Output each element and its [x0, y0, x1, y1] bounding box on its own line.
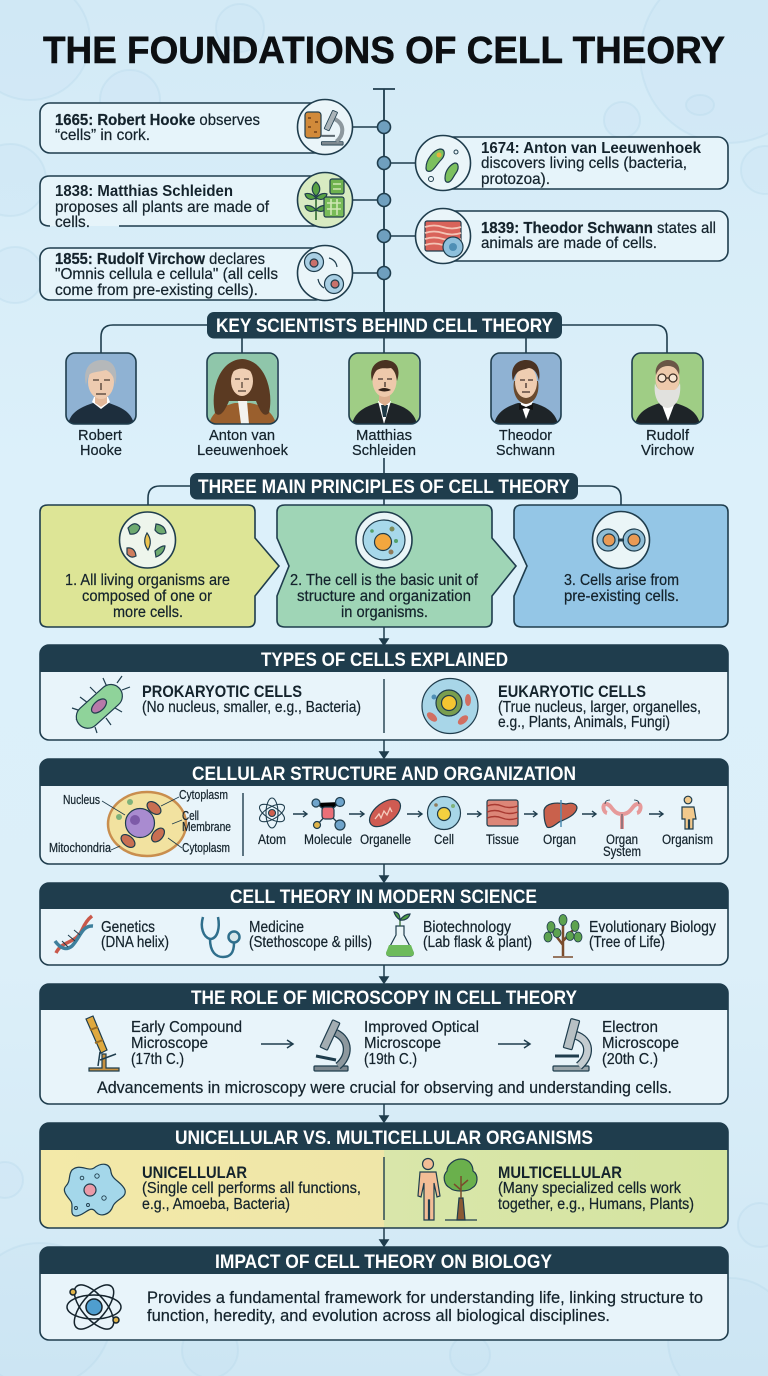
- impact text: Provides a fundamental framework for understanding life, linking structure to: [147, 1288, 703, 1307]
- hierarchy row: atom to organism: [257, 794, 713, 859]
- hierarchy labels: Atom: [258, 832, 286, 847]
- scientist names: Schleiden: [352, 442, 416, 459]
- panel: impact: [40, 1247, 728, 1340]
- eukaryotic text: (True nucleus, larger, organelles,: [498, 699, 701, 716]
- evolutionary biology text: Evolutionary Biology: [589, 919, 716, 936]
- unicellular text: [142, 1164, 361, 1213]
- panel: principle 3: 3. Cells arise from: [564, 572, 679, 589]
- unicellular text: UNICELLULAR: [142, 1164, 247, 1182]
- flow arrows: [293, 811, 663, 817]
- portrait: Robert Hooke: [66, 353, 136, 424]
- panel: principle 1: [40, 505, 279, 627]
- event: 1839 Schwann: [416, 208, 728, 264]
- electron microscope text: (20th C.): [602, 1051, 658, 1068]
- early microscope text: [131, 1019, 242, 1068]
- unicellular text: (Single cell performs all functions,: [142, 1180, 361, 1197]
- panel: principle 1: 1. All living organisms are: [65, 572, 230, 589]
- hierarchy labels: System: [603, 844, 641, 859]
- panel: principle 3: pre-existing cells.: [564, 588, 679, 605]
- panel: modern science: CELL THEORY IN MODERN SCIENCE: [230, 887, 537, 908]
- multicellular text: (Many specialized cells work: [498, 1180, 681, 1197]
- portrait: Matthias Schleiden: [349, 353, 420, 424]
- medicine text: (Stethoscope & pills): [249, 934, 372, 951]
- multicellular text: [498, 1164, 694, 1213]
- medicine text: [249, 919, 372, 951]
- hierarchy labels: [258, 832, 713, 859]
- event: 1665 Hooke: [40, 100, 352, 154]
- impact text: [147, 1288, 703, 1325]
- panel: principle 3: [514, 505, 728, 627]
- hierarchy labels: Organism: [662, 832, 713, 847]
- prokaryotic text: [142, 683, 361, 716]
- icon: electron microscope: [553, 1018, 589, 1071]
- scientist names: Schwann: [496, 442, 555, 459]
- panel: types of cells: [40, 645, 728, 740]
- panel: principle 1: composed of one or: [82, 588, 212, 605]
- scientist names: Leeuwenhoek: [197, 442, 288, 459]
- event: 1674 Leeuwenhoek: discovers living cells (bacteria,: [481, 155, 687, 172]
- eukaryotic text: e.g., Plants, Animals, Fungi): [498, 714, 670, 731]
- hierarchy labels: Organ: [543, 832, 576, 847]
- portrait: Anton van Leeuwenhoek: [207, 353, 278, 424]
- panel: principle 1: more cells.: [113, 604, 183, 621]
- impact text: function, heredity, and evolution across all biological disciplines.: [147, 1306, 610, 1325]
- scientist names: Robert: [78, 427, 123, 444]
- panel: impact: IMPACT OF CELL THEORY ON BIOLOGY: [215, 1252, 552, 1273]
- optical microscope text: [364, 1019, 479, 1068]
- panel: microscopy: THE ROLE OF MICROSCOPY IN CELL THEORY: [191, 988, 577, 1009]
- electron microscope text: Electron: [602, 1019, 658, 1036]
- timeline axis: [373, 89, 395, 312]
- multicellular text: together, e.g., Humans, Plants): [498, 1196, 694, 1213]
- icon: organism: [682, 796, 696, 829]
- icon: organ: [544, 800, 577, 828]
- event: 1855 Virchow: "Omnis cellula e cellula" (all cells: [55, 266, 278, 283]
- icon: atom: [257, 798, 287, 828]
- icon: bacterium: [72, 676, 130, 733]
- scientist names: Anton van: [209, 427, 275, 444]
- icon: early compound microscope: [86, 1016, 119, 1071]
- biotechnology text: [423, 919, 532, 951]
- microscopy caption: Advancements in microscopy were crucial for observing and understanding cells.: [97, 1079, 672, 1097]
- scientist names: Theodor: [499, 427, 552, 444]
- panel: unicellular vs multicellular: [40, 1123, 728, 1228]
- biotechnology text: Biotechnology: [423, 919, 511, 936]
- panel: modern science: [40, 883, 728, 965]
- arrows between sections: [380, 627, 388, 1246]
- event: 1855 Virchow: come from pre-existing cells).: [55, 282, 258, 299]
- early microscope text: (17th C.): [131, 1051, 184, 1068]
- timeline: [40, 89, 728, 312]
- hierarchy labels: Organ: [606, 832, 638, 847]
- diagram: labelled animal cell: Cytoplasm: [182, 841, 230, 855]
- diagram: labelled animal cell: Membrane: [182, 820, 231, 834]
- genetics text: (DNA helix): [101, 934, 169, 951]
- event: 1838 Schleiden: [40, 172, 352, 231]
- event: 1674 Leeuwenhoek: [416, 136, 728, 190]
- eukaryotic text: [498, 683, 701, 731]
- electron microscope text: [602, 1019, 679, 1068]
- scientist names: Matthias: [356, 427, 412, 444]
- connector to principles: [148, 458, 621, 505]
- optical microscope text: (19th C.): [364, 1051, 417, 1068]
- genetics text: Genetics: [101, 919, 155, 936]
- scientist names: Rudolf: [646, 427, 690, 444]
- title: THE FOUNDATIONS OF CELL THEORY: [43, 30, 725, 72]
- event: 1838 Schleiden: cells.: [55, 214, 90, 231]
- event: 1674 Leeuwenhoek: protozoa).: [481, 171, 550, 188]
- icon: DNA helix: [55, 916, 93, 953]
- event: 1839 Schwann: 1839: Theodor Schwann states all: [481, 220, 716, 237]
- panel: cellular structure: [40, 759, 728, 864]
- portrait: Theodor Schwann: [491, 353, 561, 424]
- icon: tissue: [487, 800, 518, 826]
- icon: lab flask and plant: [386, 912, 414, 956]
- panel: microscopy: [40, 984, 728, 1104]
- diagram: labelled animal cell: [49, 788, 231, 856]
- icon: cell: [428, 796, 460, 830]
- timeline nodes: [378, 120, 390, 280]
- icon: tree of life: [544, 914, 582, 957]
- scientist names: Virchow: [641, 442, 694, 459]
- early microscope text: Microscope: [131, 1035, 208, 1052]
- genetics text: [101, 919, 169, 951]
- biotechnology text: (Lab flask & plant): [423, 934, 532, 951]
- event: 1674 Leeuwenhoek: 1674: Anton van Leeuwenhoek: [481, 140, 701, 157]
- panel: principle 2: structure and organization: [297, 588, 471, 605]
- prokaryotic text: (No nucleus, smaller, e.g., Bacteria): [142, 699, 361, 716]
- icon: atom: [67, 1279, 121, 1335]
- arrow: [261, 1040, 293, 1048]
- event: 1838 Schleiden: 1838: Matthias Schleiden: [55, 183, 233, 200]
- scientist names: Hooke: [80, 442, 122, 459]
- heading: three main principles: THREE MAIN PRINCIPLES OF CELL THEORY: [198, 477, 570, 498]
- medicine text: Medicine: [249, 919, 304, 936]
- hierarchy labels: Tissue: [486, 832, 519, 847]
- eukaryotic text: EUKARYOTIC CELLS: [498, 683, 646, 701]
- panel: unicellular vs multicellular: UNICELLULAR VS. MULTICELLULAR ORGANISMS: [175, 1128, 593, 1149]
- hierarchy labels: Cell: [434, 832, 454, 847]
- icon: human and tree: [418, 1158, 477, 1220]
- panel: principle 2: in organisms.: [341, 604, 428, 621]
- panel: principle 2: 2. The cell is the basic unit of: [290, 572, 479, 589]
- event: 1855 Virchow: [40, 246, 352, 300]
- icon: improved optical microscope: [314, 1020, 348, 1071]
- event: 1838 Schleiden: proposes all plants are made of: [55, 199, 270, 216]
- icon: organelle: [365, 794, 405, 832]
- icon: eukaryotic cell: [422, 678, 478, 734]
- evolutionary biology text: [589, 919, 716, 951]
- connector to scientists: [101, 325, 667, 353]
- panel: types of cells: TYPES OF CELLS EXPLAINED: [261, 650, 508, 671]
- optical microscope text: Microscope: [364, 1035, 441, 1052]
- arrow: [498, 1040, 530, 1048]
- panel: principle 2: [277, 505, 516, 627]
- diagram: labelled animal cell: Cytoplasm: [179, 788, 228, 802]
- unicellular text: e.g., Amoeba, Bacteria): [142, 1196, 290, 1213]
- optical microscope text: Improved Optical: [364, 1019, 479, 1036]
- icon: stethoscope: [202, 917, 240, 957]
- event: 1855 Virchow: 1855: Rudolf Virchow declares: [55, 251, 265, 268]
- early microscope text: Early Compound: [131, 1019, 242, 1036]
- hierarchy labels: Molecule: [304, 832, 352, 847]
- icon: amoeba: [64, 1164, 125, 1216]
- timeline connectors: [353, 127, 415, 273]
- multicellular text: MULTICELLULAR: [498, 1164, 622, 1182]
- icon: molecule: [312, 798, 345, 830]
- panel: cellular structure: CELLULAR STRUCTURE AND ORGANIZATION: [192, 764, 576, 785]
- scientist names: [78, 427, 694, 459]
- event: 1665 Hooke: “cells” in cork.: [55, 127, 150, 144]
- event: 1839 Schwann: animals are made of cells.: [481, 235, 657, 252]
- hierarchy labels: Organelle: [360, 832, 411, 847]
- event: 1665 Hooke: 1665: Robert Hooke observes: [55, 112, 260, 129]
- evolutionary biology text: (Tree of Life): [589, 934, 665, 951]
- icon: organ system: [603, 800, 641, 829]
- diagram: labelled animal cell: Mitochondria: [49, 841, 111, 855]
- diagram: labelled animal cell: Cell: [182, 809, 199, 823]
- electron microscope text: Microscope: [602, 1035, 679, 1052]
- prokaryotic text: PROKARYOTIC CELLS: [142, 683, 302, 701]
- diagram: labelled animal cell: Nucleus: [63, 793, 100, 807]
- portrait: Rudolf Virchow: [632, 353, 703, 424]
- heading: key scientists: KEY SCIENTISTS BEHIND CELL THEORY: [216, 316, 553, 337]
